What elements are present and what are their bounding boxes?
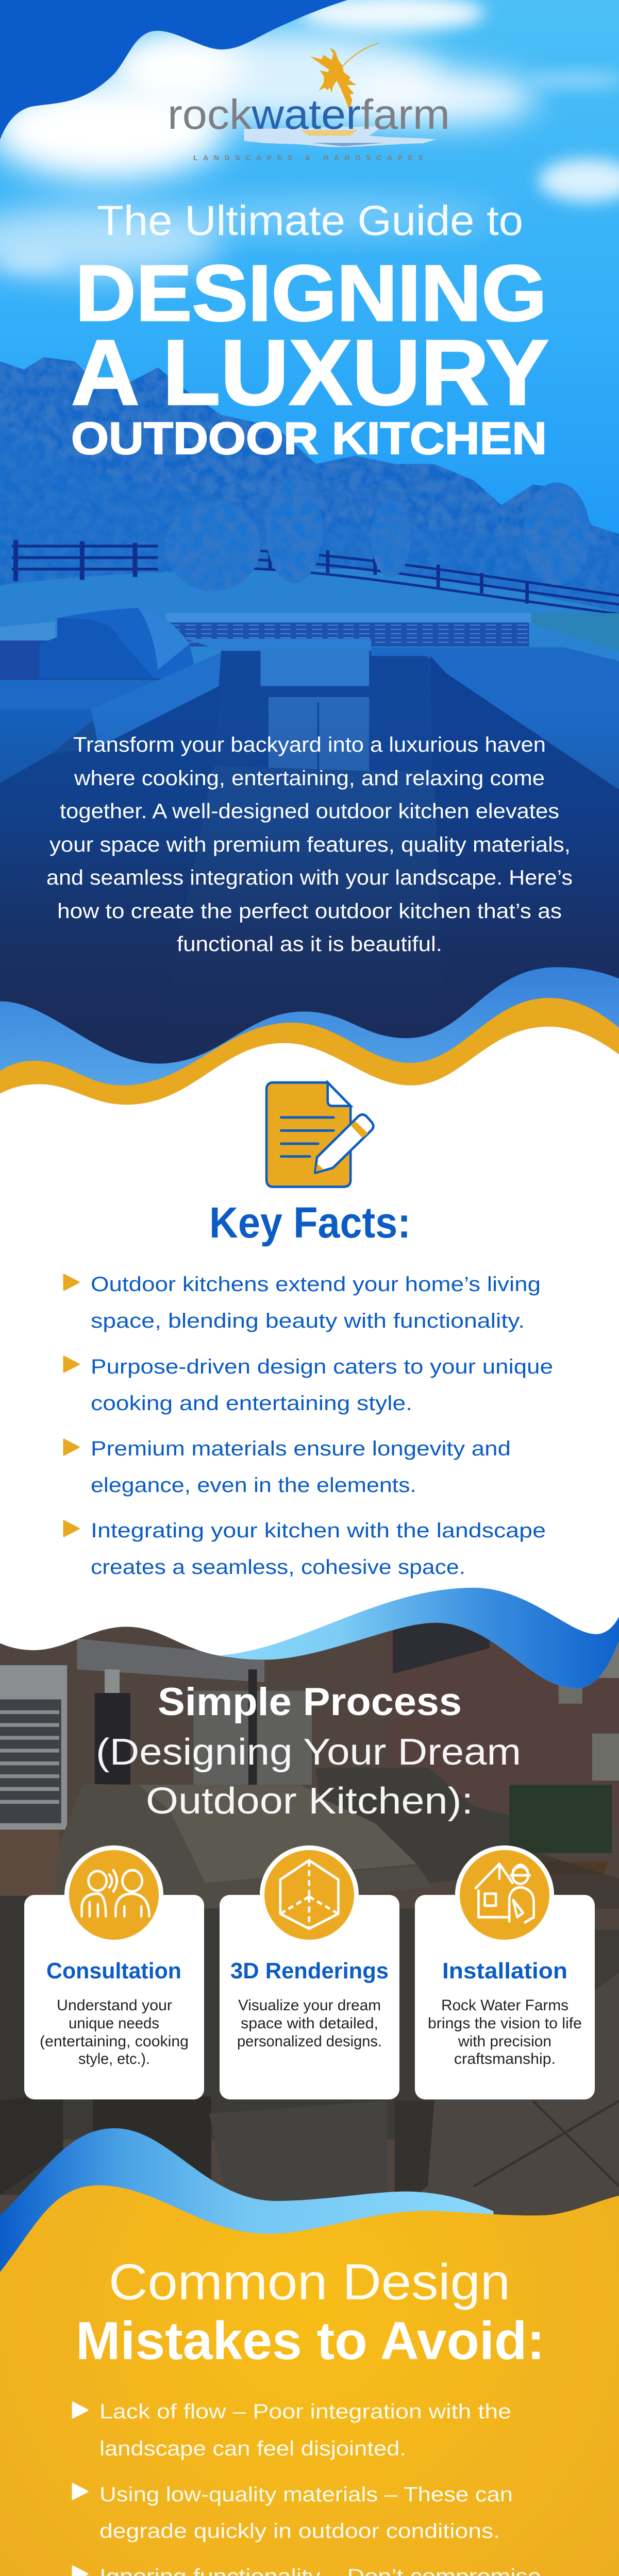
drawer xyxy=(209,2101,387,2212)
card: consultation: unique needs xyxy=(69,2015,159,2032)
logo wordmark: rockwaterfarm xyxy=(168,91,450,138)
hedge xyxy=(509,1785,612,1853)
intro paragraph: where cooking, entertaining, and relaxing come xyxy=(74,766,545,790)
bullet list: key facts: Outdoor kitchens extend your home’s living xyxy=(91,1273,541,1296)
stainless lower cabinets xyxy=(0,1896,59,2195)
section top curve: white edge xyxy=(0,1582,619,1688)
wave: gold xyxy=(0,998,619,1178)
bullet list: key facts: elegance, even in the elements. xyxy=(91,1474,416,1497)
bullet list: mistakes: Lack of flow – Poor integration with the xyxy=(99,2400,511,2423)
logo water reflection xyxy=(244,126,437,147)
hero bottom waves xyxy=(0,967,619,1342)
hero background photo: blue-toned backyard xyxy=(0,0,619,1092)
card: 3d renderings: personalized designs. xyxy=(237,2033,382,2050)
process background photo: darkened house and grills xyxy=(0,1609,619,2357)
icon: two people talking xyxy=(82,1870,149,1917)
icon: wireframe cube xyxy=(280,1860,338,1929)
card: 3d renderings: 3D Renderings xyxy=(230,1958,389,1984)
logo xyxy=(168,43,450,162)
card: installation xyxy=(415,1845,595,2099)
stone floor xyxy=(414,1956,619,2357)
bullet list: key facts: creates a seamless, cohesive space. xyxy=(91,1556,465,1579)
wave: white xyxy=(0,1027,619,1342)
outdoor kitchen xyxy=(0,608,619,1090)
left window xyxy=(0,1665,67,1829)
card: installation: Rock Water Farms xyxy=(441,1997,568,2014)
card: 3d renderings xyxy=(220,1845,399,2099)
intro paragraph: Transform your backyard into a luxurious haven xyxy=(73,733,546,756)
icon: maple leaf xyxy=(310,43,379,111)
wave: blue xyxy=(0,2128,493,2301)
heading: common design mistakes: Mistakes to Avoid: xyxy=(76,2311,545,2371)
intro paragraph: functional as it is beautiful. xyxy=(177,932,442,956)
logo tagline: LANDSCAPES & HARDSCAPES xyxy=(193,154,423,162)
card: installation: brings the vision to life xyxy=(428,2015,582,2032)
bullet list: mistakes: landscape can feel disjointed. xyxy=(99,2437,406,2460)
title: The Ultimate Guide to xyxy=(97,197,523,244)
card: installation: with precision xyxy=(458,2033,551,2050)
bullet list: key facts xyxy=(64,1273,553,1579)
bullet list: key facts: cooking and entertaining style. xyxy=(91,1392,412,1415)
title: DESIGNING xyxy=(75,249,547,337)
gold background xyxy=(0,2185,619,2576)
left brick wall xyxy=(0,1829,59,1898)
bullet list: key facts: space, blending beauty with functionality. xyxy=(91,1310,525,1332)
grill dome right xyxy=(316,1768,539,1883)
card: consultation: Understand your xyxy=(57,1997,172,2014)
card: 3d renderings: space with detailed, xyxy=(241,2015,378,2032)
dark fade overlay xyxy=(0,711,619,1030)
card: consultation: style, etc.). xyxy=(78,2050,150,2067)
title xyxy=(71,197,549,464)
intro paragraph: together. A well-designed outdoor kitchen elevates xyxy=(60,799,559,823)
clouds xyxy=(0,0,619,278)
house brick right xyxy=(387,1631,619,1827)
grill dome left xyxy=(55,1784,430,1973)
intro paragraph: and seamless integration with your landscape. Here’s xyxy=(46,866,573,889)
heading: simple process: Outdoor Kitchen): xyxy=(146,1781,473,1822)
heading: key facts: Key Facts: xyxy=(209,1198,411,1247)
icon: house and worker xyxy=(476,1864,534,1922)
patio table xyxy=(541,1861,608,1874)
intro paragraph xyxy=(46,733,573,956)
card: 3d renderings: Visualize your dream xyxy=(238,1997,381,2014)
icon: document and pencil xyxy=(266,1082,373,1187)
card: installation: Installation xyxy=(442,1958,567,1984)
intro paragraph: how to create the perfect outdoor kitchen that’s as xyxy=(57,899,562,923)
bullet list: mistakes: degrade quickly in outdoor conditions. xyxy=(99,2520,500,2543)
wave: blue swoosh xyxy=(219,1588,619,1688)
heading: common design mistakes: Common Design xyxy=(109,2253,510,2310)
heading: simple process: (Designing Your Dream xyxy=(96,1732,521,1773)
bullet list: key facts: Premium materials ensure longevity and xyxy=(91,1437,511,1460)
heading: simple process xyxy=(96,1680,521,1822)
bullet list: mistakes xyxy=(73,2400,541,2576)
dark blue top-left corner xyxy=(0,0,347,140)
tree line xyxy=(0,357,619,616)
lawn xyxy=(0,569,619,673)
bullet list: key facts: Integrating your kitchen with the landscape xyxy=(91,1519,546,1542)
card: installation: craftsmanship. xyxy=(454,2050,556,2067)
heading: common design mistakes xyxy=(76,2253,545,2371)
card: consultation: (entertaining, cooking xyxy=(40,2033,189,2050)
wave: light blue xyxy=(0,967,619,1178)
intro paragraph: your space with premium features, quality materials, xyxy=(49,833,571,856)
heading: simple process: Simple Process xyxy=(158,1680,462,1724)
title: A LUXURY xyxy=(71,321,549,425)
small trees on lawn xyxy=(166,477,590,591)
fence xyxy=(12,540,619,614)
panel: key facts xyxy=(64,1082,553,1579)
bullet list: mistakes: Using low-quality materials – These can xyxy=(99,2483,513,2506)
card: consultation xyxy=(24,1845,204,2099)
card: consultation: Consultation xyxy=(46,1958,181,1984)
title: OUTDOOR KITCHEN xyxy=(71,413,547,464)
bullet list: key facts: Purpose-driven design caters to your unique xyxy=(91,1355,553,1378)
mistakes section waves and gold background xyxy=(0,2128,619,2576)
balcony and column xyxy=(77,1639,264,1682)
